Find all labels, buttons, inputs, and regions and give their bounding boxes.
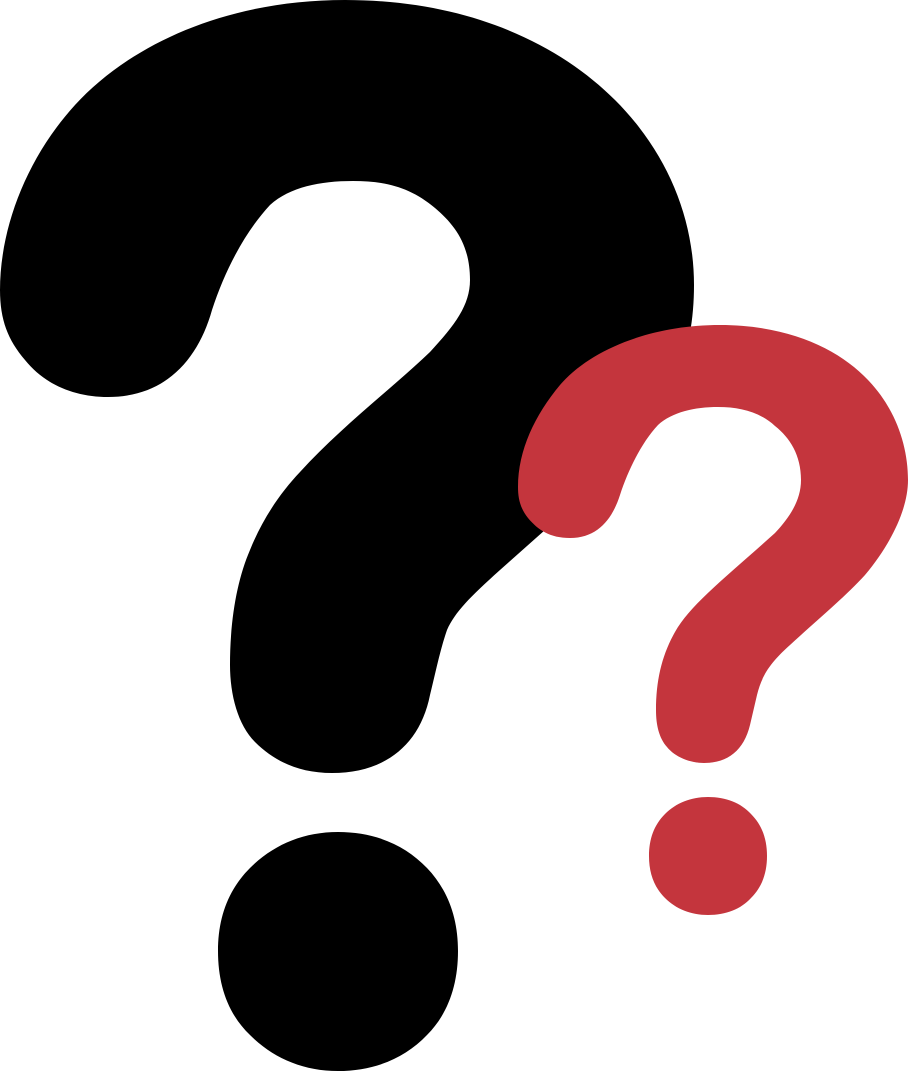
- icon: large black question mark: [0, 0, 694, 1071]
- icon: small red question mark: [518, 325, 908, 915]
